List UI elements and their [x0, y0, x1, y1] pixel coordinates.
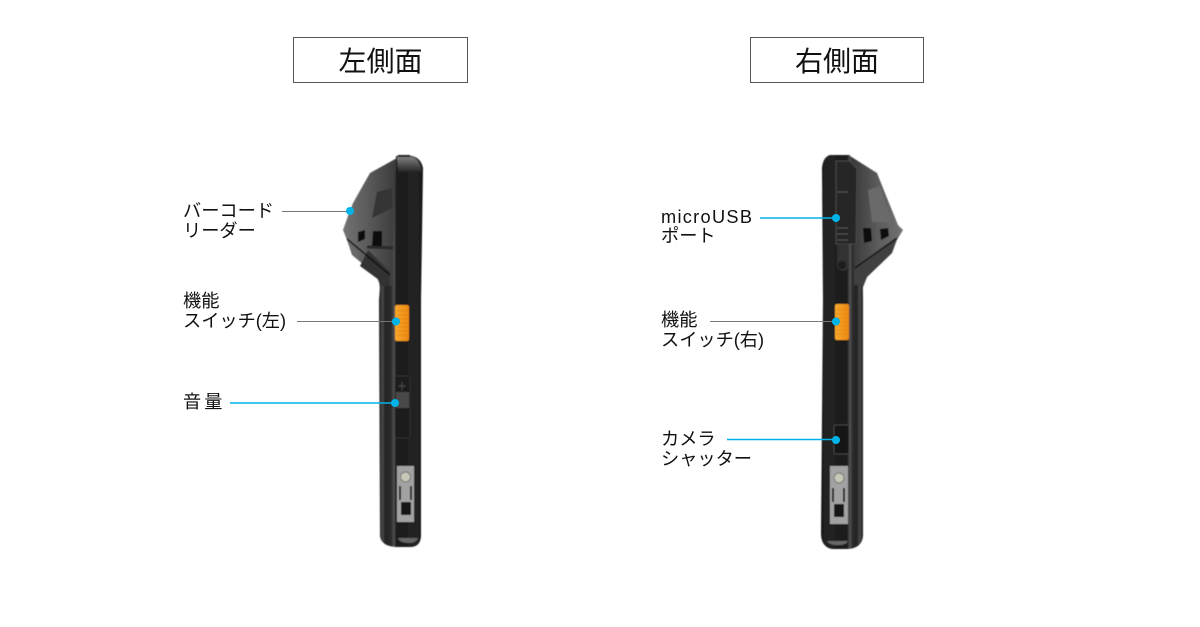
volume buttons	[395, 376, 410, 438]
bottom notch	[827, 541, 848, 545]
camera shutter	[834, 425, 849, 454]
callout: barcode reader	[183, 201, 354, 241]
heading: left side	[294, 38, 468, 82]
bottom notch	[398, 538, 418, 543]
callout: camera shutter: カメラ	[661, 429, 716, 449]
function switch	[835, 304, 849, 340]
metal connector plate	[397, 466, 414, 522]
main body	[821, 155, 863, 549]
heading: right side: 右側面	[795, 46, 879, 77]
callout: function switch right: 機能	[661, 310, 697, 330]
callout: camera shutter	[661, 429, 840, 469]
metal connector plate	[830, 466, 848, 524]
scanner slots	[358, 230, 365, 242]
scanner head	[850, 156, 903, 300]
callout: function switch right: スイッチ(右)	[661, 330, 764, 350]
callout: camera shutter: シャッター	[661, 449, 752, 469]
heading: right side	[750, 38, 924, 82]
scanner slots	[863, 228, 872, 243]
callout: microUSB port: microUSB	[661, 207, 753, 227]
callout: barcode reader: リーダー	[183, 221, 256, 241]
heading: left side: 左側面	[338, 46, 423, 77]
function switch	[395, 305, 409, 341]
callout: volume: 音量	[183, 392, 225, 412]
device: right side view	[821, 155, 903, 549]
callout: volume	[183, 392, 399, 412]
callout: barcode reader: バーコード	[183, 201, 274, 221]
top cap nub	[397, 155, 411, 158]
callout: function switch right	[661, 310, 840, 350]
callout: microUSB port	[661, 207, 840, 246]
callout: function switch left	[183, 291, 400, 331]
callout: function switch left: スイッチ(左)	[183, 311, 286, 331]
port cover	[836, 161, 857, 271]
scanner head	[343, 158, 397, 300]
callout: microUSB port: ポート	[661, 226, 716, 246]
device: left side view	[343, 155, 423, 547]
callout: function switch left: 機能	[183, 291, 219, 311]
main body	[379, 156, 423, 547]
